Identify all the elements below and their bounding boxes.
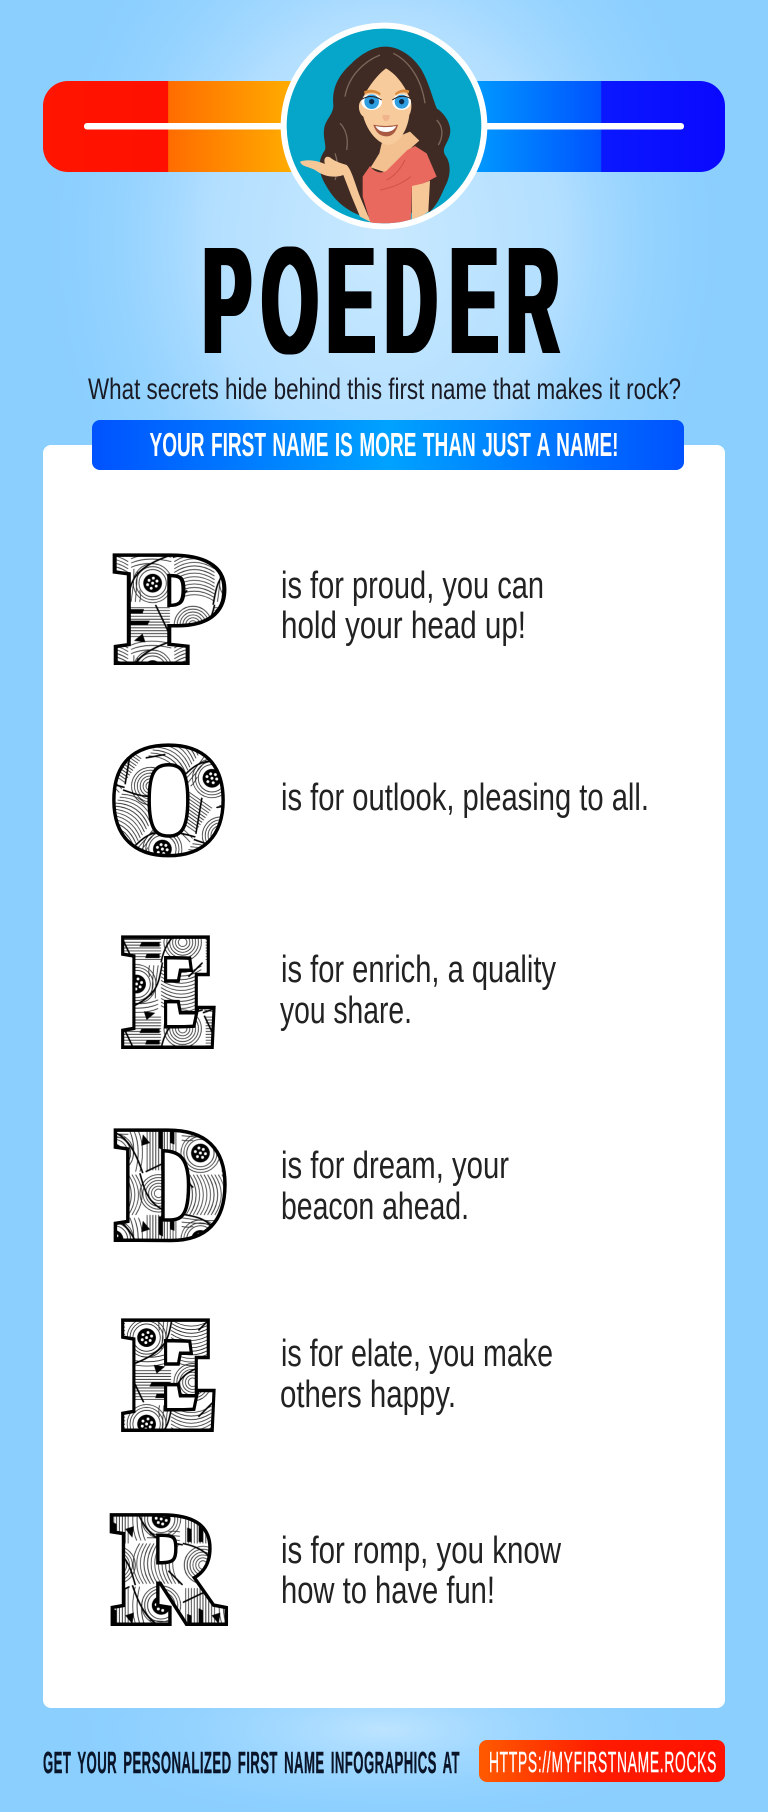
text: is for enrich xyxy=(280,949,556,1032)
row: letter E xyxy=(126,909,556,1074)
text: is for elate: others happy. xyxy=(280,1374,456,1416)
row: letter E second xyxy=(126,1292,553,1457)
text: is for proud: hold your head up! xyxy=(281,605,526,647)
text: is for romp xyxy=(281,1530,561,1612)
text: is for romp: is for romp, you know xyxy=(281,1530,561,1572)
row: letter O xyxy=(113,718,649,880)
icon: woman portrait in circle xyxy=(281,23,487,229)
row: letter D xyxy=(119,1102,509,1267)
text: is for romp: how to have fun! xyxy=(281,1570,495,1612)
text: is for proud: is for proud, you can xyxy=(281,565,544,607)
row: letter R xyxy=(115,1487,561,1651)
icon: patterned letter R: R xyxy=(115,1487,221,1651)
icon: patterned letter P: P xyxy=(119,527,222,689)
icon: patterned letter P: P xyxy=(119,527,222,689)
banner xyxy=(92,420,684,470)
icon: patterned letter D: D xyxy=(119,1102,226,1267)
header bar with white line xyxy=(43,81,725,172)
icon: patterned letter R: R xyxy=(115,1487,221,1651)
text: is for elate: is for elate, you make xyxy=(281,1333,553,1375)
text: is for enrich: you share. xyxy=(280,990,412,1032)
icon: patterned letter E: E xyxy=(126,1292,215,1457)
icon: patterned letter E: E xyxy=(126,909,215,1074)
text: is for outlook: is for outlook, pleasing to all. xyxy=(281,777,649,819)
text: is for dream: beacon ahead. xyxy=(281,1186,469,1228)
text: is for dream: is for dream, your xyxy=(281,1145,509,1187)
icon: patterned letter O: O xyxy=(113,718,224,880)
text: is for dream xyxy=(281,1145,509,1228)
icon: patterned letter E: E xyxy=(126,909,215,1074)
text: is for elate xyxy=(280,1333,553,1416)
icon: patterned letter O: O xyxy=(113,718,224,880)
icon: patterned letter E: E xyxy=(126,1292,215,1457)
text: is for proud xyxy=(281,565,544,647)
icon: patterned letter D: D xyxy=(119,1102,226,1267)
footer url button xyxy=(479,1740,725,1782)
title: POEDER xyxy=(203,216,559,386)
text: is for enrich: is for enrich, a quality xyxy=(281,949,556,991)
row: letter P xyxy=(119,527,544,689)
panel: white card xyxy=(43,445,725,1708)
